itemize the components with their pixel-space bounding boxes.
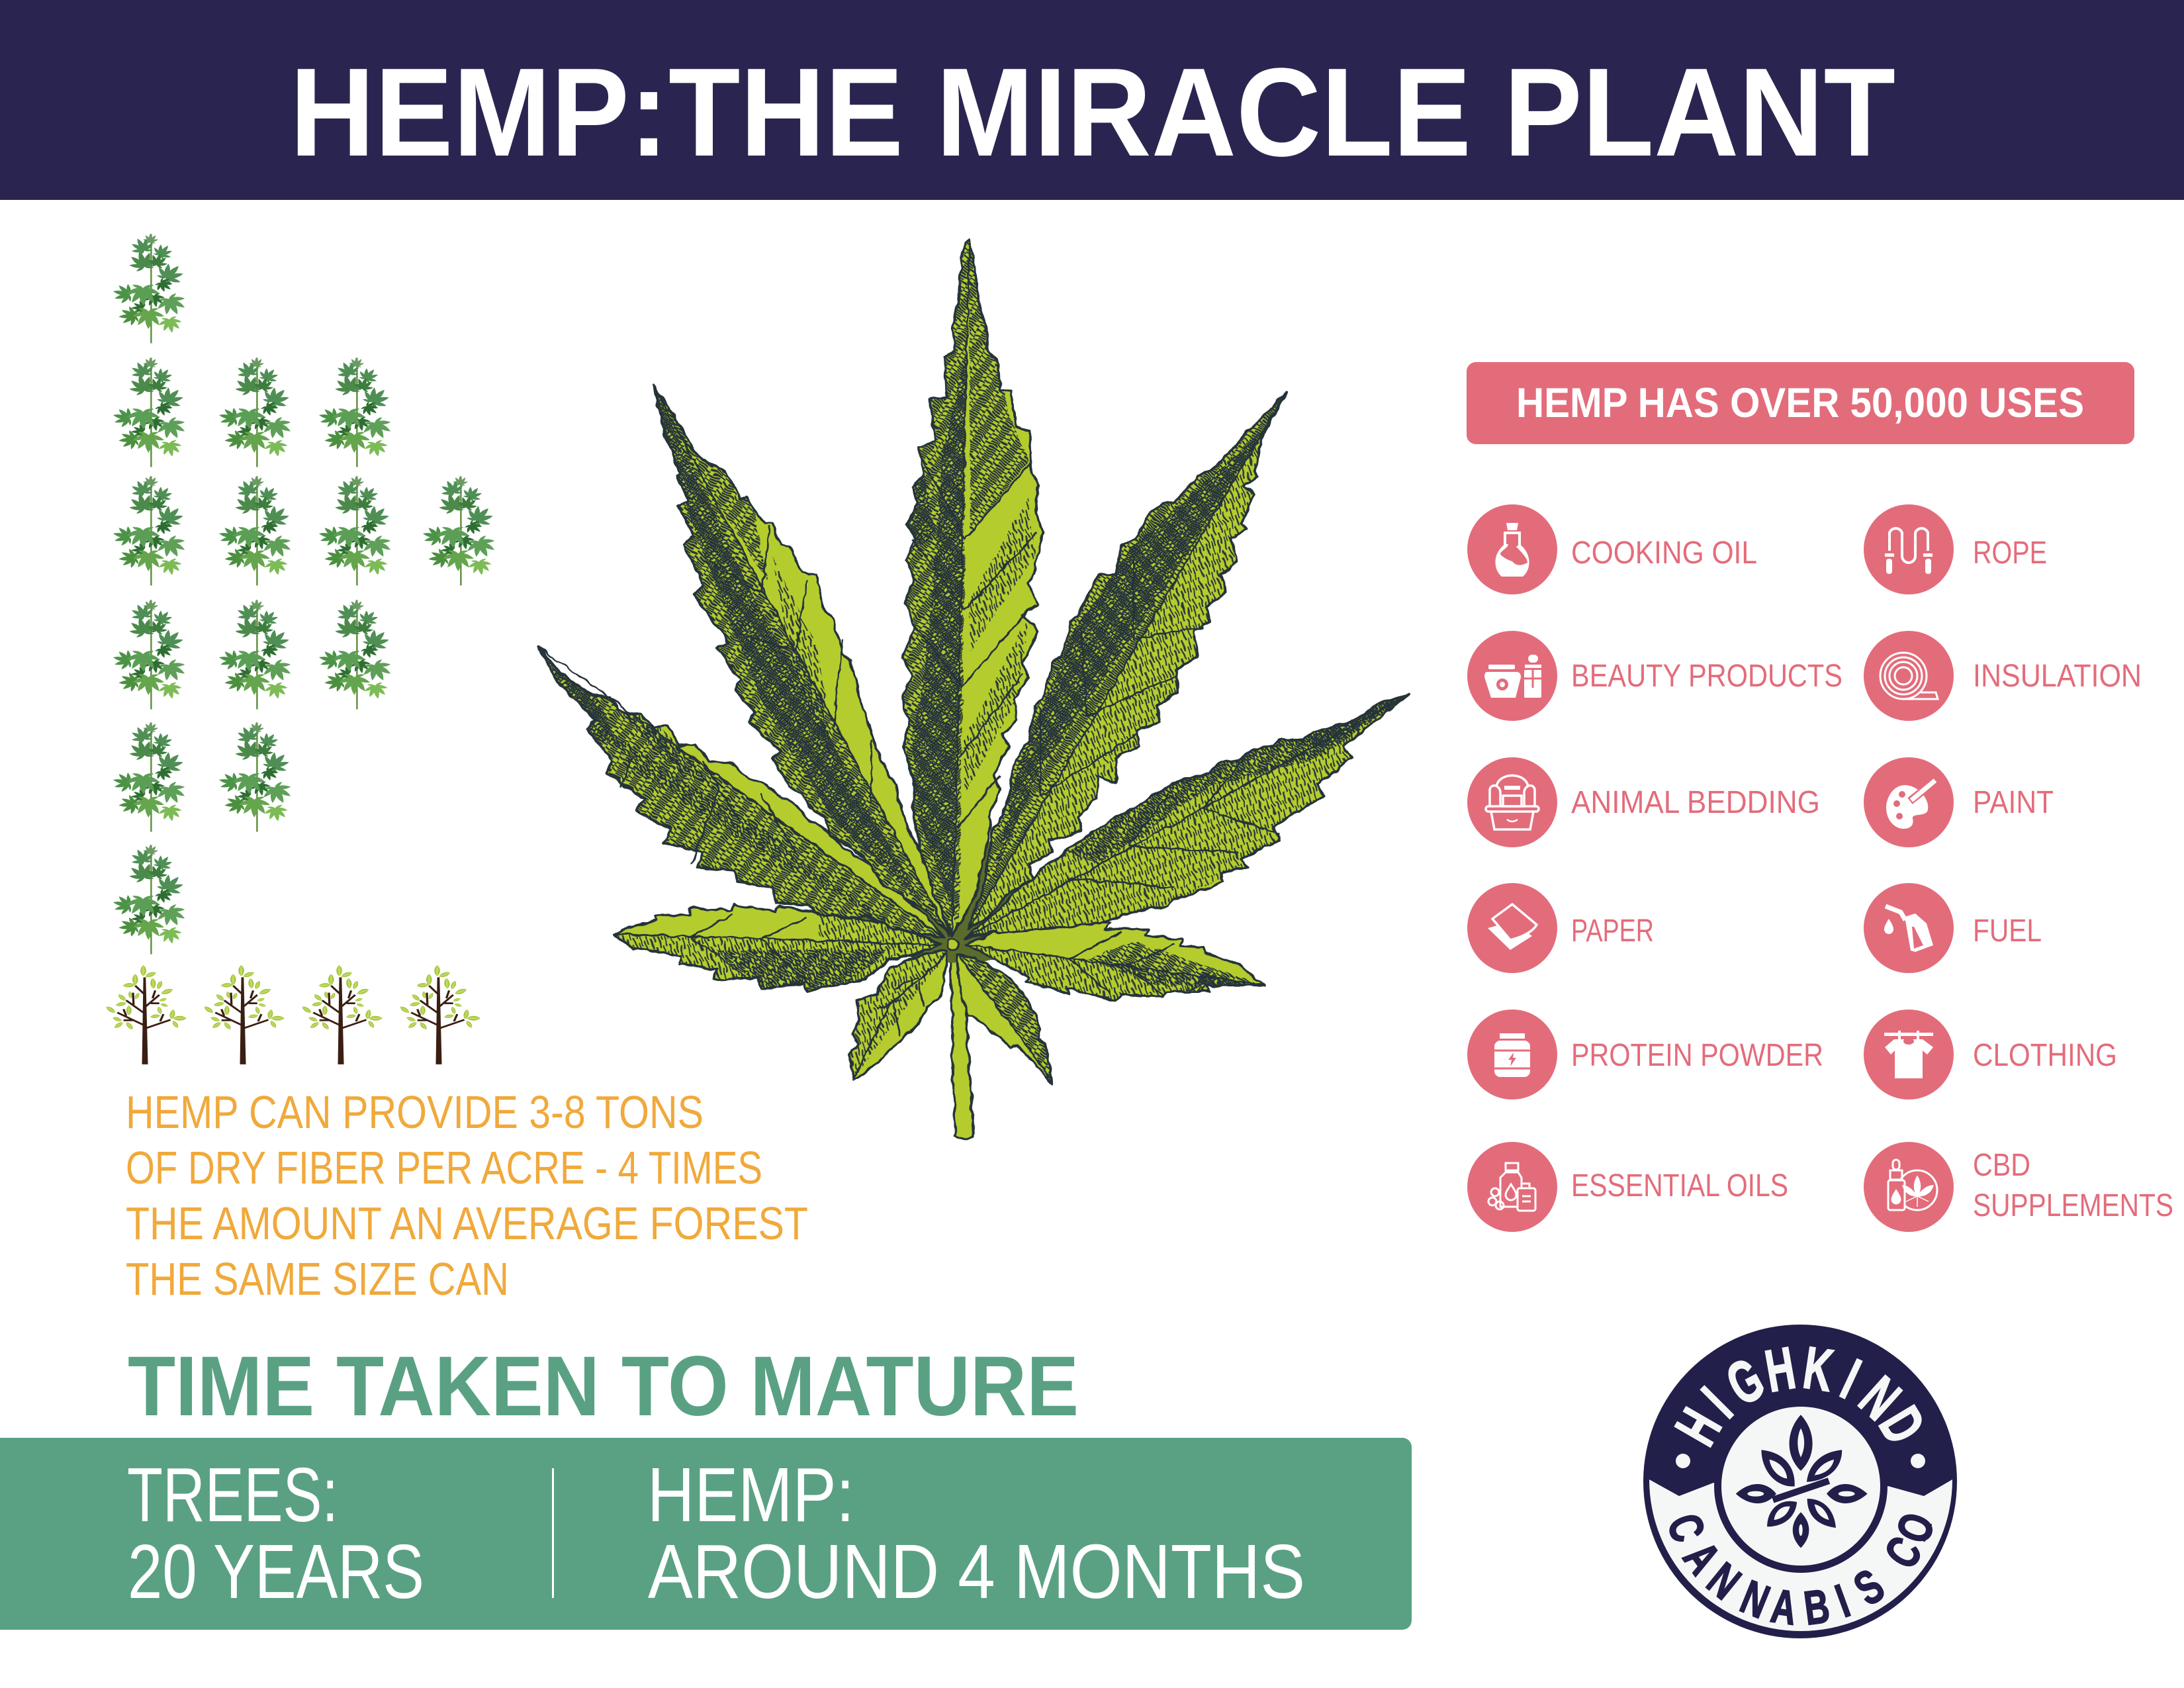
icon: shirt on a line (1864, 1009, 1954, 1100)
use: rope (1864, 504, 2047, 594)
icon: oil bottle (1467, 504, 1557, 594)
icon: fuel nozzle (1864, 883, 1954, 973)
trees duration: TREES: (127, 1452, 338, 1538)
hemp duration (647, 1452, 1305, 1615)
label: PAINT (1973, 785, 2054, 820)
plants row 5 (110, 722, 298, 832)
logo bottom lettering: I (1829, 1575, 1856, 1628)
logo top lettering: G (1716, 1346, 1774, 1419)
uses list (1467, 504, 2173, 1232)
use: insulation (1864, 631, 2142, 721)
plants row 3 (110, 476, 502, 586)
use: paint (1864, 757, 2054, 847)
use: paper (1467, 883, 1654, 973)
plants row 6 (110, 845, 192, 955)
logo bottom lettering: N (1698, 1553, 1750, 1610)
use: fuel (1864, 883, 2042, 973)
trees pictogram (105, 965, 480, 1064)
logo bottom lettering: C (1874, 1528, 1933, 1577)
use: cbd supplements (1864, 1142, 2173, 1232)
use: protein powder (1467, 1009, 1823, 1100)
logo bottom lettering: B (1801, 1579, 1833, 1636)
icon: rope (1864, 504, 1954, 594)
far left leaflet (614, 894, 941, 994)
uses heading pill: HEMP HAS OVER 50,000 USES (1516, 380, 2084, 426)
label: PROTEIN POWDER (1571, 1038, 1823, 1073)
label: INSULATION (1973, 659, 2142, 694)
label: ANIMAL BEDDING (1571, 785, 1820, 820)
label: PAPER (1571, 914, 1654, 949)
logo top lettering: H (1760, 1335, 1800, 1405)
title: HEMP:THE MIRACLE PLANT (290, 42, 1895, 183)
logo bottom lettering: A (1673, 1532, 1731, 1583)
logo bottom lettering: N (1733, 1570, 1776, 1629)
fiber yield text block: OF DRY FIBER PER ACRE - 4 TIMES (126, 1142, 762, 1194)
icon: palette and brush (1864, 757, 1954, 847)
use: clothing (1864, 1009, 2117, 1100)
upper right leaflet (924, 393, 1287, 929)
leaf base backing (860, 817, 1064, 962)
plants row 4 (110, 600, 398, 710)
logo top lettering: N (1847, 1364, 1913, 1432)
large hemp leaf illustration (538, 240, 1409, 1139)
logo top lettering: I (1832, 1347, 1870, 1412)
logo top lettering: D (1866, 1396, 1938, 1454)
logo top lettering: K (1799, 1335, 1837, 1405)
label: ROPE (1973, 536, 2047, 571)
uses heading pill (1467, 362, 2134, 444)
small lower left leaflet (842, 952, 947, 1080)
use: beauty products (1467, 631, 1843, 721)
lower left leaflet (538, 647, 944, 938)
logo bottom lettering: S (1845, 1559, 1893, 1616)
label: CBD (1973, 1148, 2030, 1183)
trees duration: 20 YEARS (128, 1528, 424, 1615)
icon: insulation roll (1864, 631, 1954, 721)
icon: paper sheets (1467, 883, 1557, 973)
label: FUEL (1973, 914, 2042, 949)
trees duration (127, 1452, 424, 1615)
icon: pet bed (1467, 757, 1557, 847)
icon: cream jar and bottle (1467, 631, 1557, 721)
time to mature heading: TIME TAKEN TO MATURE (128, 1339, 1079, 1434)
use: animal bedding (1467, 757, 1820, 847)
logo top lettering: H (1663, 1398, 1735, 1456)
plants row 1 (110, 234, 192, 344)
far right leaflet (965, 920, 1266, 1006)
logo centre emblem (1736, 1415, 1868, 1548)
upper left leaflet (653, 386, 950, 935)
logo bottom lettering: O (1886, 1507, 1945, 1550)
small lower right leaflet (956, 947, 1058, 1083)
icon: protein jar (1467, 1009, 1557, 1100)
logo top lettering (1663, 1335, 1938, 1456)
label: ESSENTIAL OILS (1571, 1168, 1788, 1203)
logo bottom lettering (1657, 1507, 1945, 1636)
icon: oil bottles and flowers (1467, 1142, 1557, 1232)
hemp duration: AROUND 4 MONTHS (648, 1528, 1305, 1615)
label: BEAUTY PRODUCTS (1571, 659, 1843, 694)
leaf centre node (947, 938, 959, 950)
logo bottom lettering: C (1657, 1507, 1715, 1549)
label: CLOTHING (1973, 1038, 2117, 1073)
fiber yield text block (126, 1086, 808, 1305)
fiber yield text block: THE AMOUNT AN AVERAGE FOREST (126, 1197, 808, 1249)
logo top lettering: I (1690, 1376, 1745, 1430)
label: COOKING OIL (1571, 536, 1757, 571)
maturity comparison bar (0, 1438, 1412, 1630)
lower right leaflet (965, 694, 1409, 938)
plants row 2 (110, 357, 398, 467)
fiber yield text block: THE SAME SIZE CAN (126, 1253, 509, 1305)
centre top leaflet (889, 240, 1043, 935)
fiber yield text block: HEMP CAN PROVIDE 3-8 TONS (126, 1086, 704, 1138)
logo: HighKind Cannabis Co (1643, 1325, 1957, 1638)
icon: dropper bottle and leaf (1864, 1142, 1954, 1232)
header banner (0, 0, 2184, 200)
leaf stem (950, 950, 974, 1139)
logo bottom lettering: A (1768, 1579, 1799, 1635)
label (1973, 1148, 2173, 1223)
hemp duration: HEMP: (647, 1452, 854, 1538)
hemp plants pictogram (110, 234, 502, 955)
use: essential oils (1467, 1142, 1788, 1232)
use: cooking oil (1467, 504, 1757, 594)
